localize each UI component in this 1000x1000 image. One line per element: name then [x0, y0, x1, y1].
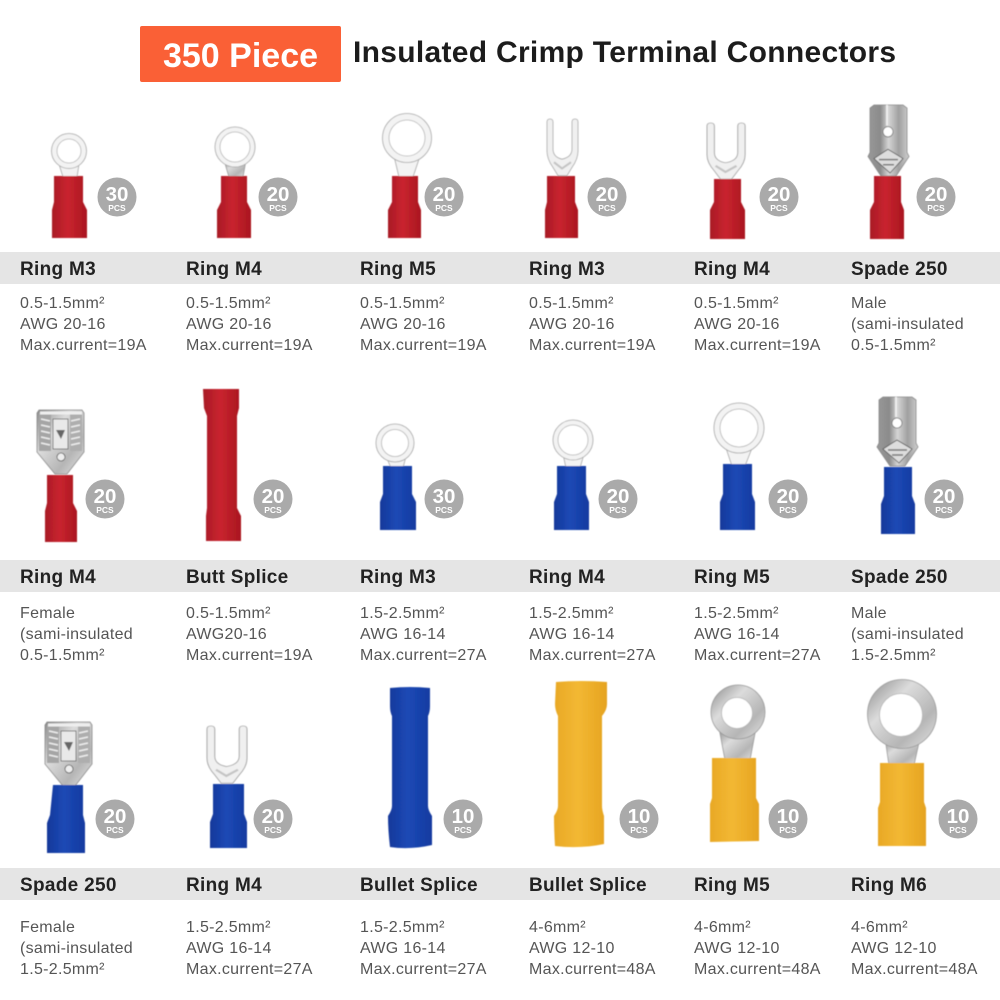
count badge: [424, 480, 464, 518]
count badge: 20: [433, 183, 455, 206]
count badge: 20: [777, 485, 799, 508]
count badge: [258, 178, 298, 216]
count badge: [924, 480, 964, 518]
connector icon: [868, 105, 909, 239]
item: Spade female red: [20, 410, 133, 664]
specs: 0.5-1.5mm²: [360, 295, 445, 312]
specs: Male: [851, 605, 887, 622]
count badge: PCS: [949, 825, 967, 835]
connector icon: [45, 722, 92, 853]
specs: Max.current=19A: [20, 337, 147, 354]
count badge: [598, 480, 638, 518]
specs: (sami-insulated: [20, 940, 133, 957]
specs: 4-6mm²: [851, 919, 908, 936]
specs: [186, 295, 313, 354]
specs: 4-6mm²: [694, 919, 751, 936]
count badge: PCS: [598, 203, 616, 213]
specs: Max.current=27A: [529, 647, 656, 664]
connector icon: [877, 397, 918, 534]
specs: Male: [851, 295, 887, 312]
specs: 1.5-2.5mm²: [694, 605, 779, 622]
specs: [186, 919, 313, 978]
specs: 1.5-2.5mm²: [360, 919, 445, 936]
specs: [20, 919, 133, 978]
label: Ring M4: [186, 259, 262, 280]
count badge: 20: [768, 183, 790, 206]
specs: 0.5-1.5mm²: [529, 295, 614, 312]
count badge: 10: [628, 805, 650, 828]
count badge: PCS: [106, 825, 124, 835]
count badge: [768, 480, 808, 518]
specs: AWG 12-10: [529, 940, 615, 957]
count badge: 20: [262, 805, 284, 828]
title badge: 350 Piece: 350 Piece: [163, 37, 318, 75]
count badge: PCS: [779, 825, 797, 835]
item: Spade 250 male blue: [851, 397, 964, 664]
specs: Max.current=48A: [694, 961, 821, 978]
specs: [360, 295, 487, 354]
grey header band: row 1: [0, 252, 1000, 284]
count badge: PCS: [264, 505, 282, 515]
item: Spade 250 male red: [851, 105, 964, 354]
count badge: 20: [925, 183, 947, 206]
label: Bullet Splice: [529, 875, 647, 896]
item: Spade 250 female blue: [20, 722, 134, 978]
specs: [186, 605, 313, 664]
label: Ring M4: [694, 259, 770, 280]
label: Ring M5: [694, 875, 770, 896]
title badge: 350 Piece: [140, 26, 341, 82]
item: Ring M6 yellow: [851, 680, 978, 978]
count badge: PCS: [264, 825, 282, 835]
specs: 1.5-2.5mm²: [360, 605, 445, 622]
connector icon: [710, 685, 765, 842]
label: Ring M4: [186, 875, 262, 896]
specs: 0.5-1.5mm²: [694, 295, 779, 312]
count badge: PCS: [435, 203, 453, 213]
specs: [360, 919, 487, 978]
label: Ring M5: [694, 567, 770, 588]
specs: (sami-insulated: [20, 626, 133, 643]
count badge: PCS: [269, 203, 287, 213]
specs: AWG 20-16: [20, 316, 106, 333]
specs: (sami-insulated: [851, 626, 964, 643]
specs: Max.current=27A: [360, 647, 487, 664]
label: Ring M5: [360, 259, 436, 280]
specs: AWG 20-16: [360, 316, 446, 333]
label: Ring M6: [851, 875, 927, 896]
title: [140, 26, 896, 82]
specs: Max.current=19A: [186, 647, 313, 664]
count badge: 20: [933, 485, 955, 508]
label: Spade 250: [851, 567, 948, 588]
specs: [529, 919, 656, 978]
count badge: 30: [106, 183, 128, 206]
specs: [529, 605, 656, 664]
label: Spade 250: [20, 875, 117, 896]
specs: [20, 295, 147, 354]
item: Ring M4 blue: [529, 420, 656, 664]
count badge: 20: [607, 485, 629, 508]
specs: [851, 919, 978, 978]
specs: [851, 295, 964, 354]
specs: AWG 20-16: [186, 316, 272, 333]
grey header band: row 2: [0, 560, 1000, 592]
item: Bullet Splice yellow: [529, 681, 658, 978]
specs: Max.current=48A: [529, 961, 656, 978]
count badge: [96, 800, 134, 838]
specs: AWG 16-14: [360, 626, 446, 643]
specs: 0.5-1.5mm²: [20, 647, 105, 664]
specs: AWG 12-10: [694, 940, 780, 957]
grey header band: row 3: [0, 868, 1000, 900]
item: Ring M3 blue: [360, 424, 487, 664]
connector icon: [203, 389, 241, 541]
count badge: 10: [777, 805, 799, 828]
label: Ring M3: [360, 567, 436, 588]
specs: [360, 605, 487, 664]
specs: Max.current=19A: [694, 337, 821, 354]
specs: AWG 20-16: [529, 316, 615, 333]
specs: AWG 16-14: [529, 626, 615, 643]
count badge: PCS: [108, 203, 126, 213]
item: Fork M4 blue: [186, 726, 313, 978]
label: Spade 250: [851, 259, 948, 280]
connector icon: [376, 424, 416, 530]
specs: [694, 919, 821, 978]
specs: 1.5-2.5mm²: [529, 605, 614, 622]
count badge: PCS: [609, 505, 627, 515]
count badge: [98, 178, 136, 216]
count badge: 20: [94, 485, 116, 508]
item: Ring M5 red: [360, 114, 487, 354]
specs: [20, 605, 133, 664]
specs: 0.5-1.5mm²: [186, 605, 271, 622]
count badge: 10: [947, 805, 969, 828]
label: Ring M4: [529, 567, 605, 588]
count badge: 20: [262, 485, 284, 508]
item: Ring M4 red: [186, 127, 313, 354]
item: Fork M3 red: [529, 119, 656, 354]
label: Butt Splice: [186, 567, 289, 588]
specs: Max.current=27A: [694, 647, 821, 664]
count badge: 20: [267, 183, 289, 206]
specs: Max.current=27A: [186, 961, 313, 978]
item: Fork M4 red: [694, 123, 821, 354]
count badge: [938, 800, 978, 838]
count badge: PCS: [96, 505, 114, 515]
count badge: [588, 178, 626, 216]
count badge: PCS: [927, 203, 945, 213]
count badge: [254, 480, 292, 518]
count badge: 20: [596, 183, 618, 206]
specs: (sami-insulated: [851, 316, 964, 333]
specs: Max.current=19A: [186, 337, 313, 354]
label: Ring M3: [529, 259, 605, 280]
connector icon: [215, 127, 255, 238]
specs: 0.5-1.5mm²: [186, 295, 271, 312]
item: Butt Splice red: [186, 389, 313, 664]
connector icon: [868, 680, 936, 846]
specs: 1.5-2.5mm²: [20, 961, 105, 978]
connector icon: [714, 403, 764, 530]
specs: AWG 16-14: [360, 940, 446, 957]
connector icon: [37, 410, 84, 542]
specs: Female: [20, 605, 75, 622]
connector icon: [553, 420, 593, 530]
item: Ring M5 yellow: [694, 685, 821, 978]
label: Ring M4: [20, 567, 96, 588]
connector icon: [388, 687, 432, 848]
connector icon: [554, 681, 607, 847]
specs: AWG20-16: [186, 626, 267, 643]
count badge: [86, 480, 124, 518]
specs: Max.current=27A: [360, 961, 487, 978]
specs: AWG 12-10: [851, 940, 937, 957]
count badge: PCS: [935, 505, 953, 515]
count badge: PCS: [630, 825, 648, 835]
specs: [851, 605, 964, 664]
specs: AWG 20-16: [694, 316, 780, 333]
connector icon: [207, 726, 247, 848]
count badge: [916, 178, 956, 216]
title text: Insulated Crimp Terminal Connectors: [353, 36, 896, 69]
connector icon: [545, 119, 578, 238]
count badge: 10: [452, 805, 474, 828]
count badge: PCS: [779, 505, 797, 515]
specs: [694, 295, 821, 354]
specs: Female: [20, 919, 75, 936]
specs: AWG 16-14: [694, 626, 780, 643]
specs: AWG 16-14: [186, 940, 272, 957]
specs: 1.5-2.5mm²: [851, 647, 936, 664]
count badge: PCS: [454, 825, 472, 835]
count badge: [760, 178, 798, 216]
item: Ring M3 red: [20, 134, 147, 354]
connector icon: [52, 134, 87, 238]
count badge: 20: [104, 805, 126, 828]
count badge: [254, 800, 292, 838]
count badge: PCS: [435, 505, 453, 515]
specs: [529, 295, 656, 354]
specs: 4-6mm²: [529, 919, 586, 936]
label: Ring M3: [20, 259, 96, 280]
connector icon: [707, 123, 745, 239]
item: Bullet Splice blue: [360, 687, 487, 978]
specs: Max.current=48A: [851, 961, 978, 978]
label: Bullet Splice: [360, 875, 478, 896]
specs: Max.current=19A: [360, 337, 487, 354]
count badge: [768, 800, 808, 838]
item: Ring M5 blue: [694, 403, 821, 664]
specs: 1.5-2.5mm²: [186, 919, 271, 936]
specs: Max.current=19A: [529, 337, 656, 354]
specs: 0.5-1.5mm²: [20, 295, 105, 312]
connector icon: [382, 114, 432, 238]
count badge: [444, 800, 482, 838]
count badge: [620, 800, 658, 838]
specs: [694, 605, 821, 664]
count badge: PCS: [770, 203, 788, 213]
specs: 0.5-1.5mm²: [851, 337, 936, 354]
count badge: [424, 178, 464, 216]
count badge: 30: [433, 485, 455, 508]
